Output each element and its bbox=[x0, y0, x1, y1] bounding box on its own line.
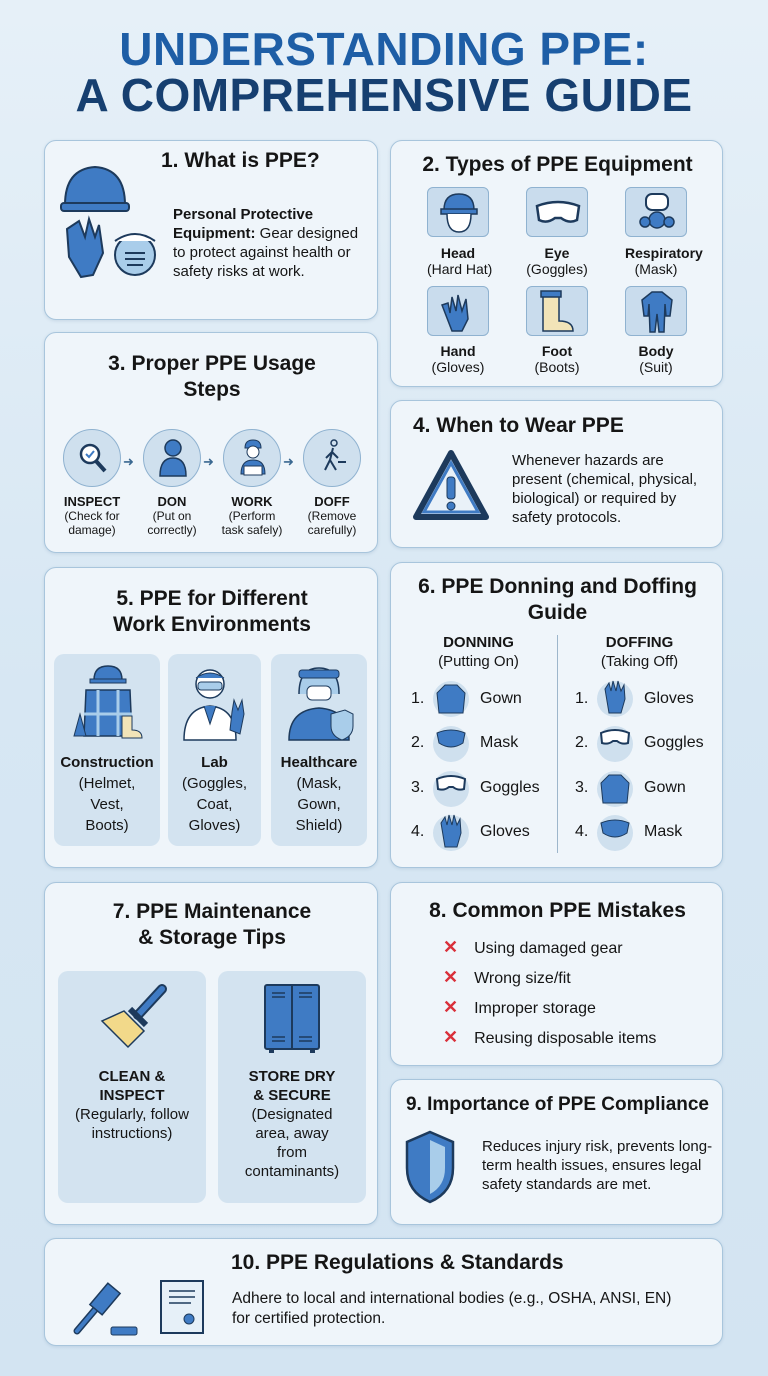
panel: when to wear bbox=[390, 400, 723, 548]
step flow: (Put on bbox=[153, 509, 191, 523]
doffing column: Mask bbox=[644, 823, 682, 840]
panel: donning and doffing bbox=[390, 562, 723, 868]
icon: helmet gloves mask bbox=[60, 166, 156, 278]
step flow: correctly) bbox=[147, 523, 197, 537]
title: A COMPREHENSIVE GUIDE bbox=[75, 69, 693, 121]
tile: construction bbox=[54, 654, 160, 846]
tile: clean: CLEAN & bbox=[99, 1068, 165, 1085]
icon grid: Hand bbox=[440, 343, 476, 359]
donning column: Gloves bbox=[480, 823, 530, 840]
icon grid: (Boots) bbox=[534, 359, 580, 375]
heading: 8. Common PPE Mistakes bbox=[429, 899, 686, 922]
tile: store: (Designated bbox=[252, 1106, 332, 1123]
tile: store: from bbox=[277, 1144, 307, 1161]
tile: lab: (Goggles, bbox=[182, 775, 247, 792]
panel: mistakes bbox=[390, 882, 723, 1066]
step flow: task safely) bbox=[222, 523, 282, 537]
heading: 5. PPE for Different bbox=[116, 587, 308, 610]
icon grid: (Mask) bbox=[635, 261, 677, 277]
list: ✕ bbox=[443, 1027, 458, 1047]
tile: construction: (Helmet, bbox=[79, 775, 135, 792]
tile: clean: INSPECT bbox=[99, 1087, 164, 1104]
step flow: damage) bbox=[68, 523, 116, 537]
icon grid: Respiratory bbox=[625, 245, 703, 261]
title: UNDERSTANDING PPE: bbox=[119, 23, 649, 75]
heading: Guide bbox=[528, 601, 587, 624]
heading: 4. When to Wear PPE bbox=[413, 414, 624, 437]
text block: Adhere to local and international bodies (e.g., OSHA, ANSI, EN) bbox=[232, 1290, 671, 1307]
tile: lab: Coat, bbox=[197, 796, 232, 813]
list: ✕ bbox=[443, 997, 458, 1017]
tile: healthcare: (Mask, bbox=[296, 775, 342, 792]
doffing column: 3. bbox=[575, 779, 588, 796]
step flow: carefully) bbox=[308, 523, 356, 537]
donning column: Mask bbox=[480, 734, 518, 751]
tile: construction: Vest, bbox=[90, 796, 124, 813]
list: ✕ bbox=[443, 967, 458, 987]
step flow bbox=[63, 429, 361, 537]
icon grid: (Suit) bbox=[639, 359, 673, 375]
doffing column: DOFFING bbox=[606, 634, 673, 651]
icon grid: Foot bbox=[542, 343, 572, 359]
doffing column: Gloves bbox=[644, 690, 694, 707]
tile: store: STORE DRY bbox=[249, 1068, 335, 1085]
step flow: DON bbox=[158, 494, 186, 509]
icon grid: (Goggles) bbox=[526, 261, 588, 277]
heading: Steps bbox=[183, 378, 241, 401]
heading: Work Environments bbox=[113, 613, 311, 636]
list: Improper storage bbox=[474, 1000, 596, 1017]
text block: Whenever hazards are present (chemical, physical, biological) or required by safety protocols. bbox=[512, 452, 697, 526]
text block: for certified protection. bbox=[232, 1310, 385, 1327]
tile: lab bbox=[168, 654, 261, 846]
heading bbox=[113, 587, 311, 636]
panel: compliance bbox=[390, 1079, 723, 1225]
step flow: ➜ bbox=[283, 454, 294, 469]
doffing column: 2. bbox=[575, 734, 588, 751]
tile: clean bbox=[58, 971, 206, 1203]
heading: 2. Types of PPE Equipment bbox=[422, 153, 693, 176]
icon grid: Body bbox=[638, 343, 674, 359]
step flow: WORK bbox=[231, 494, 273, 509]
tile: store bbox=[218, 971, 366, 1203]
heading bbox=[418, 575, 697, 624]
heading: 1. What is PPE? bbox=[161, 149, 320, 172]
heading bbox=[108, 352, 316, 401]
tile: healthcare: Healthcare bbox=[281, 754, 357, 771]
text block: Reduces injury risk, prevents long-term health issues, ensures legal safety standards are met. bbox=[482, 1138, 712, 1193]
icon grid: (Gloves) bbox=[432, 359, 484, 375]
step flow: (Perform bbox=[229, 509, 275, 523]
title bbox=[75, 23, 693, 121]
panel: types of PPE bbox=[390, 140, 723, 387]
heading: 3. Proper PPE Usage bbox=[108, 352, 316, 375]
donning column: 2. bbox=[411, 734, 424, 751]
text block: Personal Protective Equipment: Gear designed to protect against health or safety risks at work. bbox=[173, 206, 358, 280]
heading: 9. Importance of PPE Compliance bbox=[406, 1094, 709, 1115]
doffing column bbox=[575, 634, 704, 851]
text block bbox=[232, 1290, 671, 1327]
icon: gavel and certificate bbox=[74, 1280, 204, 1336]
tile: store: contaminants) bbox=[245, 1163, 339, 1180]
doffing column: 4. bbox=[575, 823, 588, 840]
icon grid: (Hard Hat) bbox=[427, 261, 492, 277]
step flow: ➜ bbox=[203, 454, 214, 469]
list: Reusing disposable items bbox=[474, 1030, 656, 1047]
donning column: Gown bbox=[480, 690, 522, 707]
doffing column: 1. bbox=[575, 690, 588, 707]
step flow: DOFF bbox=[314, 494, 350, 509]
panel: regulations bbox=[44, 1238, 723, 1346]
icon grid bbox=[427, 187, 703, 375]
donning column: (Putting On) bbox=[438, 653, 519, 670]
donning column: 4. bbox=[411, 823, 424, 840]
tile: healthcare bbox=[271, 654, 367, 846]
panel: proper usage steps bbox=[44, 332, 378, 553]
step flow: (Check for bbox=[64, 509, 120, 523]
doffing column: (Taking Off) bbox=[601, 653, 678, 670]
tile: construction: Construction bbox=[60, 754, 154, 771]
icon grid: Head bbox=[441, 245, 475, 261]
heading bbox=[113, 900, 311, 949]
doffing column: Gown bbox=[644, 779, 686, 796]
tile: construction: Boots) bbox=[85, 817, 129, 834]
tile: clean: instructions) bbox=[92, 1125, 172, 1142]
heading: & Storage Tips bbox=[138, 926, 286, 949]
donning column: 3. bbox=[411, 779, 424, 796]
heading: 6. PPE Donning and Doffing bbox=[418, 575, 697, 598]
donning column: DONNING bbox=[443, 634, 514, 651]
step flow: INSPECT bbox=[64, 494, 120, 509]
tile: store: & SECURE bbox=[253, 1087, 331, 1104]
donning column bbox=[411, 634, 540, 851]
list: ✕ bbox=[443, 937, 458, 957]
step flow: ➜ bbox=[123, 454, 134, 469]
donning column: Goggles bbox=[480, 779, 540, 796]
icon: shield bbox=[406, 1130, 454, 1204]
tile: healthcare: Gown, bbox=[297, 796, 341, 813]
tile: lab: Lab bbox=[201, 754, 228, 771]
heading: 7. PPE Maintenance bbox=[113, 900, 311, 923]
list bbox=[443, 937, 656, 1047]
heading: 10. PPE Regulations & Standards bbox=[231, 1251, 564, 1274]
panel: maintenance bbox=[44, 882, 378, 1225]
tile: lab: Gloves) bbox=[189, 817, 240, 834]
icon grid: Eye bbox=[545, 245, 569, 261]
list: Using damaged gear bbox=[474, 940, 623, 957]
tile: healthcare: Shield) bbox=[296, 817, 342, 834]
step flow: (Remove bbox=[308, 509, 356, 523]
donning column: 1. bbox=[411, 690, 424, 707]
doffing column: Goggles bbox=[644, 734, 704, 751]
tile: store: area, away bbox=[255, 1125, 329, 1142]
panel: what is PPE bbox=[44, 140, 378, 320]
icon: warning triangle bbox=[413, 450, 489, 520]
tile: clean: (Regularly, follow bbox=[75, 1106, 189, 1123]
list: Wrong size/fit bbox=[474, 970, 571, 987]
panel: environments bbox=[44, 567, 378, 868]
